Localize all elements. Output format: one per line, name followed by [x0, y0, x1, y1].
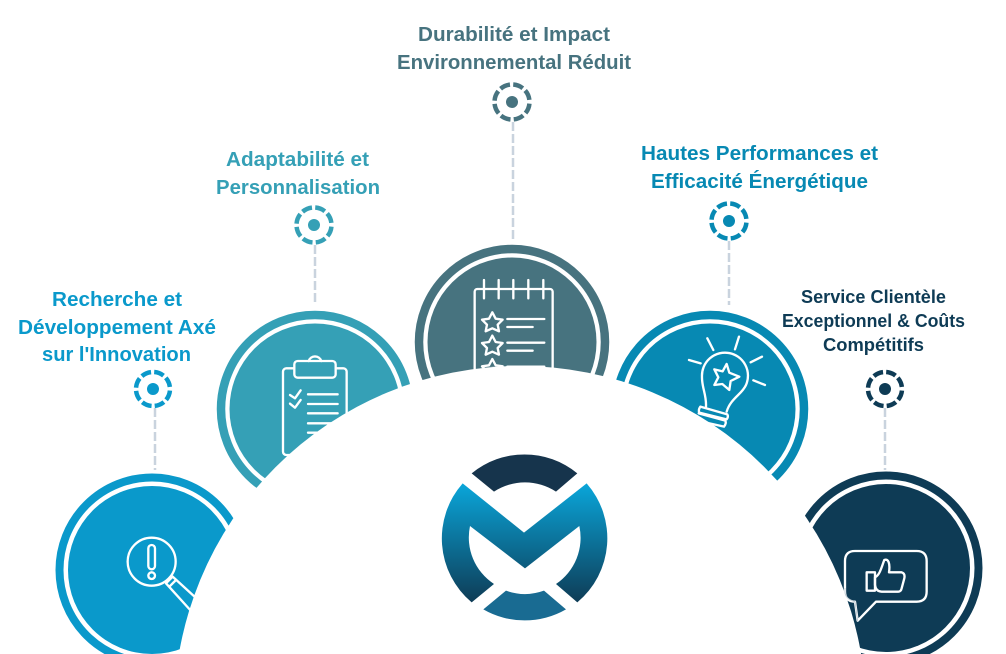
connector: durabilité	[512, 122, 514, 241]
heading: durabilité	[397, 24, 631, 74]
icon: magnifier with exclamation mark	[128, 538, 200, 612]
heading: recherche	[18, 289, 216, 366]
marker: performances	[712, 204, 746, 238]
heading: performances	[641, 143, 878, 193]
logo: bottom arc	[483, 591, 566, 620]
connector: recherche	[154, 408, 156, 470]
panel: recherche circle	[60, 478, 244, 654]
heading: service: Exceptionnel & Coûts	[782, 311, 965, 331]
marker: service	[868, 372, 902, 406]
heading: recherche: Recherche et	[52, 289, 182, 311]
marker: adaptabilité	[296, 208, 332, 242]
heading: adaptabilité: Personnalisation	[216, 177, 380, 199]
connector: performances	[728, 241, 730, 305]
panel: service circle	[794, 476, 978, 654]
heading: performances: Efficacité Énergétique	[651, 170, 868, 193]
logo	[442, 454, 607, 620]
connector: service	[884, 408, 886, 470]
logo: M shape	[442, 483, 607, 602]
heading: service: Service Clientèle	[801, 287, 946, 307]
heading: adaptabilité: Adaptabilité et	[226, 149, 369, 171]
heading: recherche: sur l'Innovation	[42, 344, 191, 366]
heading: adaptabilité	[216, 149, 380, 199]
panel: durabilité circle	[419, 249, 605, 435]
heading: service	[782, 287, 965, 355]
icon: light bulb with star	[689, 337, 765, 427]
icon: speech bubble with thumbs up	[845, 551, 927, 621]
connector: adaptabilité	[314, 245, 316, 305]
heading: durabilité: Environnemental Réduit	[397, 52, 631, 74]
heading: service: Compétitifs	[823, 335, 924, 355]
panel: central white semicircle	[174, 366, 866, 654]
heading: recherche: Développement Axé	[18, 317, 216, 339]
icon: clipboard	[283, 356, 347, 455]
marker: durabilité	[494, 84, 530, 120]
icon: notebook with stars	[475, 280, 553, 409]
panel: adaptabilité circle	[221, 315, 409, 503]
heading: performances: Hautes Performances et	[641, 143, 878, 165]
marker: recherche	[136, 372, 170, 406]
logo: top arc	[472, 454, 577, 492]
heading: durabilité: Durabilité et Impact	[418, 24, 610, 46]
panel: performances circle	[616, 315, 804, 503]
